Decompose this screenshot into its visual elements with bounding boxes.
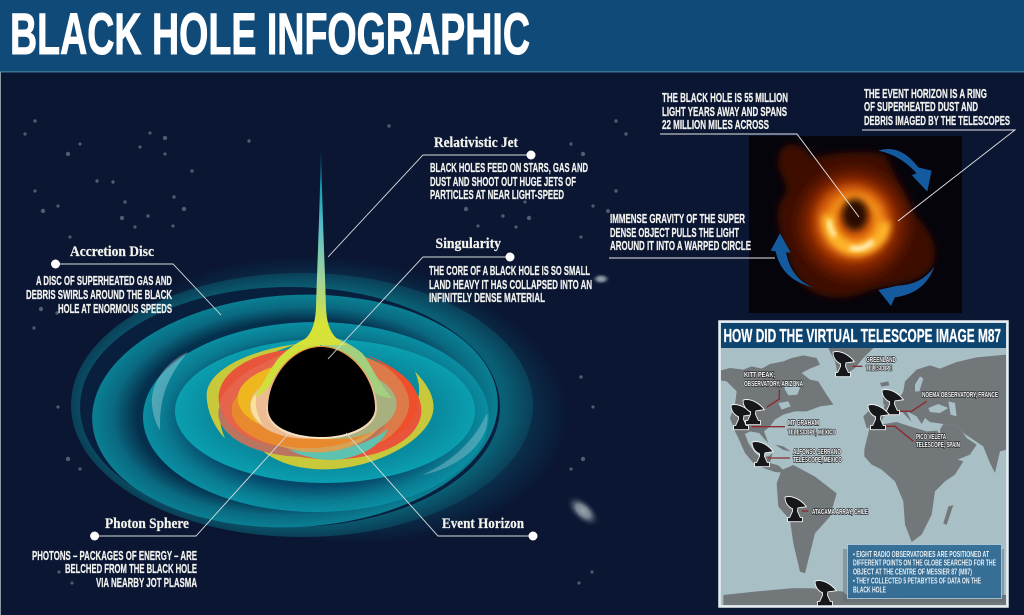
callout: relativistic jet: Relativistic Jet xyxy=(434,135,518,151)
callout: singularity: INFINITELY DENSE MATERIAL xyxy=(429,290,545,305)
callout: event horizon xyxy=(346,433,538,540)
callout: photon sphere: Photon Sphere xyxy=(105,516,190,532)
accretion disc rings xyxy=(71,233,584,567)
callout: photon sphere: BELCHED FROM THE BLACK HOLE xyxy=(65,561,197,576)
world map xyxy=(715,348,1013,605)
M87 telescope image xyxy=(749,136,962,313)
panel: virtual telescope map xyxy=(715,322,1013,606)
callout: accretion disc: A DISC OF SUPERHEATED GAS AND xyxy=(36,273,172,288)
dark shadow xyxy=(842,199,868,231)
callout: singularity: LAND HEAVY IT HAS COLLAPSED INTO AN xyxy=(429,277,592,292)
title: BLACK HOLE INFOGRAPHIC xyxy=(10,2,530,67)
telescope labels: ALFONSO SERRANO xyxy=(793,449,841,456)
callout: singularity: Singularity xyxy=(436,236,502,252)
callout: accretion disc: DEBRIS SWIRLS AROUND THE BLACK xyxy=(26,287,172,302)
telescope labels: TELESCOPE, MEXICO xyxy=(793,457,842,464)
callout: singularity: THE CORE OF A BLACK HOLE IS SO SMALL xyxy=(429,263,590,278)
telescope labels: TELESCOPE, SPAIN xyxy=(916,442,960,449)
callout: photon sphere: VIA NEARBY JOT PLASMA xyxy=(96,575,197,590)
callout: accretion disc: Accretion Disc xyxy=(70,244,155,260)
annotation: distance: LIGHT YEARS AWAY AND SPANS xyxy=(662,104,787,119)
callout: photon sphere xyxy=(32,432,290,590)
annotation: distance: 22 MILLION MILES ACROSS xyxy=(662,117,769,132)
arch over the hole xyxy=(255,333,392,398)
event horizon rim xyxy=(266,346,377,439)
info box xyxy=(843,544,1004,602)
light streaks xyxy=(152,352,488,475)
glowing halo xyxy=(778,144,935,298)
star field xyxy=(23,119,628,585)
telescope labels: MT GRAHAM xyxy=(788,420,819,427)
callout: photon sphere: PHOTONS – PACKAGES OF ENERGY – ARE xyxy=(32,548,197,563)
relativistic jet xyxy=(296,145,347,345)
telescope labels: OBSERVATORY, ARIZONA xyxy=(744,381,803,388)
callout: relativistic jet: BLACK HOLES FEED ON STARS, GAS AND xyxy=(430,160,588,175)
annotation: distance xyxy=(660,90,859,217)
black hole diagram xyxy=(71,145,584,567)
annotation: event horizon ring xyxy=(862,86,1015,221)
telescope labels: ATACAMA ARRAY, CHILE xyxy=(812,509,868,516)
hot inner disc xyxy=(207,339,434,469)
annotation: gravity xyxy=(609,211,775,258)
callout: event horizon: Event Horizon xyxy=(442,516,524,532)
telescope labels: TELESCOPE, MEXICO xyxy=(788,430,836,436)
telescope icons xyxy=(732,352,902,605)
annotation: gravity: AROUND IT INTO A WARPED CIRCLE xyxy=(610,238,751,253)
black hole xyxy=(268,347,375,437)
telescope connector lines xyxy=(752,366,927,511)
galaxy: beside singularity text xyxy=(591,273,611,285)
rotation arrows xyxy=(771,149,934,306)
telescope labels: TELESCOPE xyxy=(866,366,892,372)
callout: relativistic jet: DUST AND SHOOT OUT HUGE JETS OF xyxy=(430,174,576,189)
callout: relativistic jet xyxy=(328,135,588,257)
telescope labels: GREENLAND xyxy=(866,357,896,364)
callout: accretion disc xyxy=(26,244,221,316)
telescope labels xyxy=(744,357,998,516)
callout: relativistic jet: PARTICLES AT NEAR LIGHT-SPEED xyxy=(430,187,564,202)
annotation: distance: THE BLACK HOLE IS 55 MILLION xyxy=(662,90,788,105)
callout: singularity xyxy=(328,236,592,359)
annotation: gravity: IMMENSE GRAVITY OF THE SUPER xyxy=(610,211,745,226)
telescope labels: PICO VELETA xyxy=(916,434,946,441)
callout: accretion disc: HOLE AT ENORMOUS SPEEDS xyxy=(58,301,172,316)
galaxy: lower right xyxy=(560,489,606,533)
telescope labels: KITT PEAK, xyxy=(744,372,775,379)
info box: BLACK HOLE xyxy=(853,584,886,594)
annotation: gravity: DENSE OBJECT PULLS THE LIGHT xyxy=(610,225,739,240)
